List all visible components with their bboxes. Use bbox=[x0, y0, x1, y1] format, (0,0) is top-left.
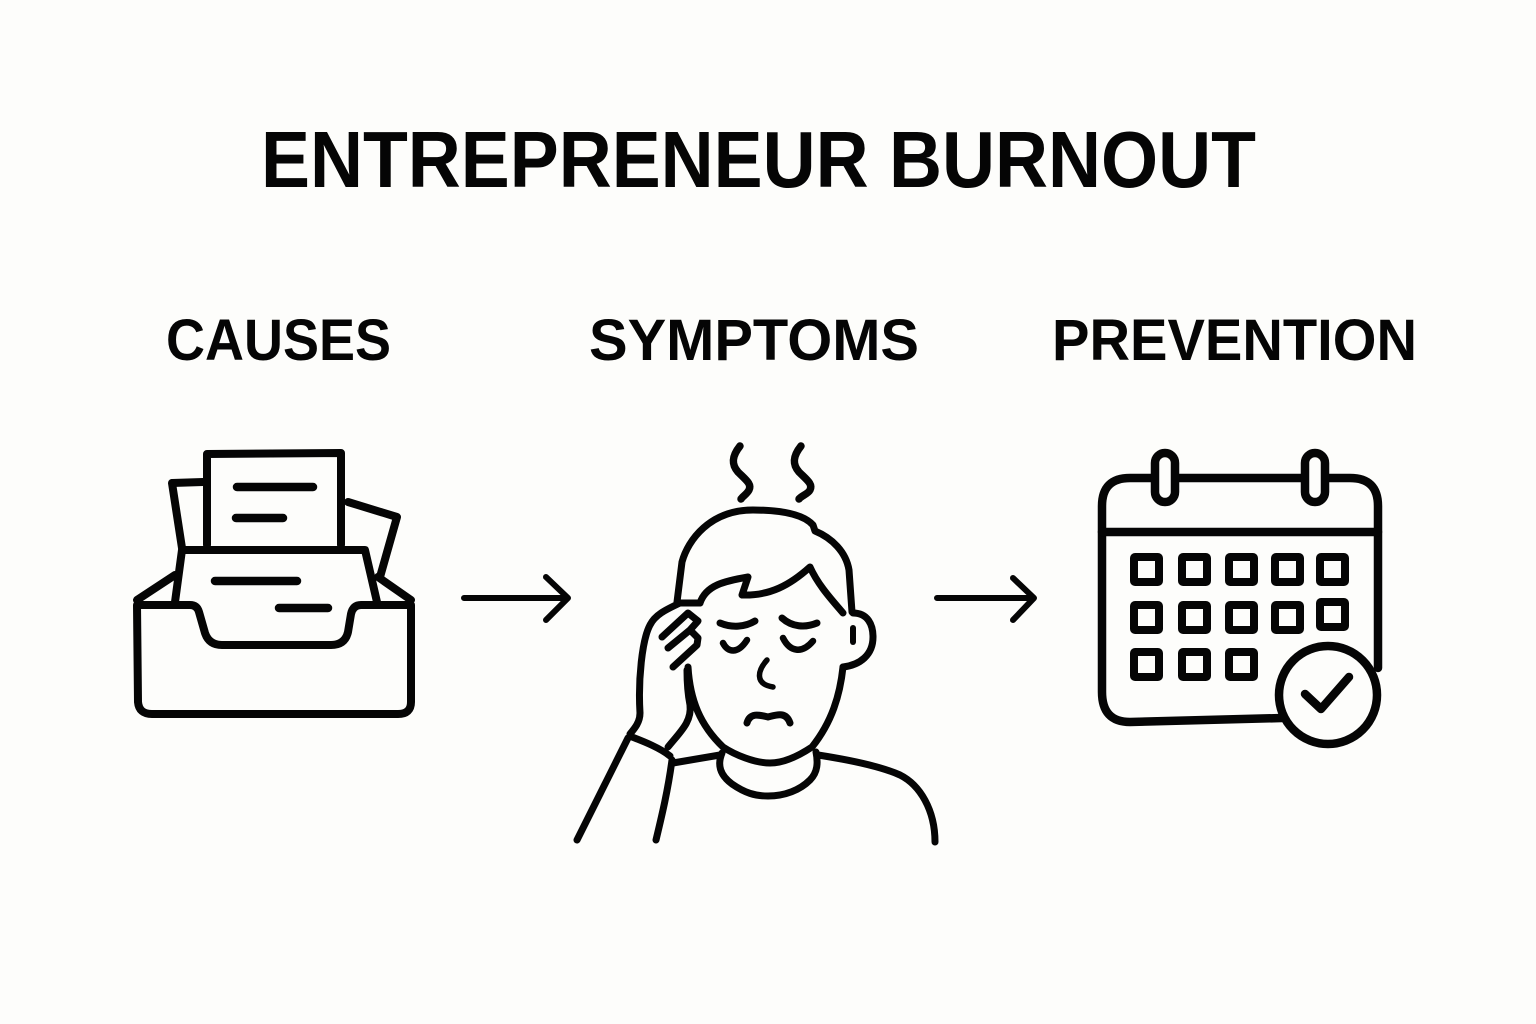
face outline bbox=[688, 667, 843, 763]
heading: prevention: PREVENTION bbox=[1052, 308, 1417, 373]
nose bbox=[759, 660, 773, 687]
arrow: causes to symptoms bbox=[464, 577, 568, 620]
sweater shoulders bbox=[818, 755, 935, 842]
hair and fringe bbox=[677, 510, 852, 612]
icon: stressed person holding head bbox=[577, 446, 935, 842]
calendar rings bbox=[1155, 453, 1175, 502]
icon: inbox tray with papers bbox=[137, 453, 411, 714]
hand bbox=[630, 603, 700, 734]
eyebrows and eyes bbox=[720, 621, 755, 626]
ear bbox=[843, 613, 873, 667]
check badge bbox=[1279, 646, 1377, 744]
calendar date squares bbox=[1134, 557, 1345, 677]
heading: causes: CAUSES bbox=[166, 308, 391, 373]
mouth bbox=[747, 715, 790, 723]
title: ENTREPRENEUR BURNOUT bbox=[261, 115, 1256, 204]
icon: calendar with check mark bbox=[1102, 453, 1378, 744]
collar bbox=[720, 752, 817, 796]
fingers bbox=[662, 613, 698, 667]
arrow: symptoms to prevention bbox=[937, 578, 1034, 620]
heading: symptoms: SYMPTOMS bbox=[589, 308, 919, 373]
icon: steam above head bbox=[733, 446, 811, 499]
